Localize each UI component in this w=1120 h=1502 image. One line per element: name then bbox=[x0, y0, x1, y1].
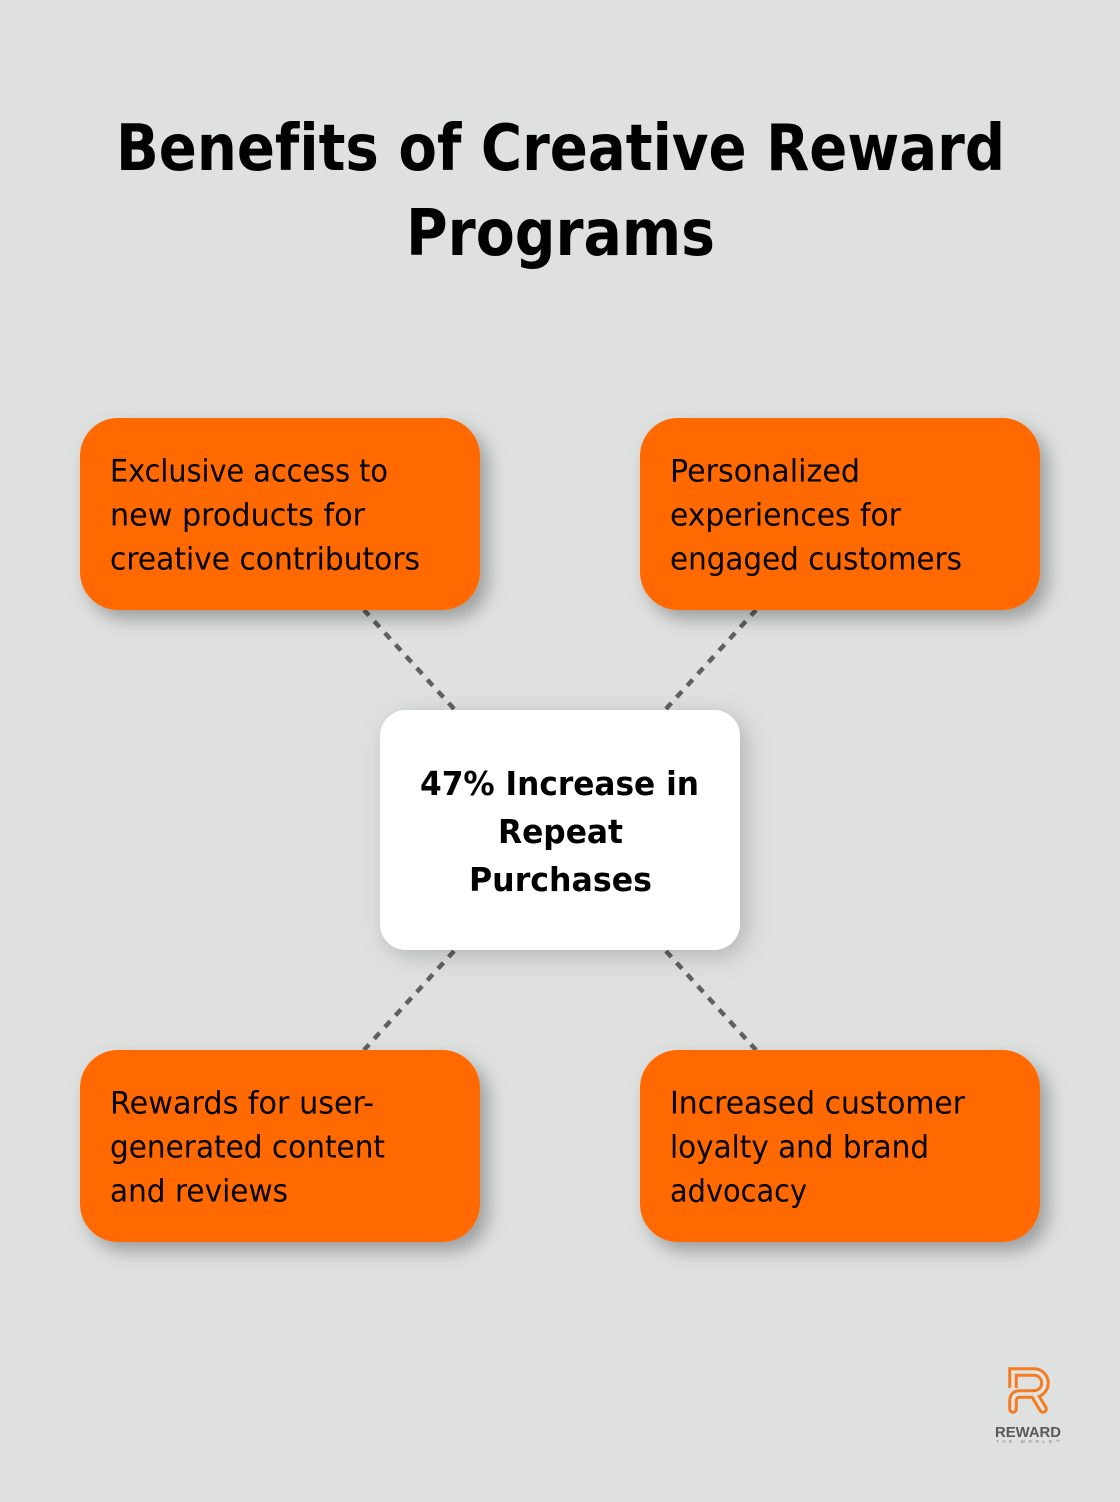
connector: bottom left bbox=[364, 950, 455, 1050]
panel: exclusive access: Exclusive access to bbox=[110, 454, 388, 490]
panel: personalized experiences: engaged customers bbox=[670, 542, 962, 578]
panel: exclusive access: new products for bbox=[110, 498, 365, 534]
tagline: THE WORLD™ bbox=[996, 1439, 1060, 1444]
panel: user-generated rewards: generated content bbox=[110, 1130, 385, 1166]
panel: customer loyalty: Increased customer bbox=[670, 1086, 965, 1122]
panel: personalized experiences bbox=[640, 418, 1040, 610]
panel: central stat: 47% Increase in bbox=[420, 764, 699, 803]
panel: user-generated rewards bbox=[80, 1050, 480, 1242]
title: Benefits of Creative Reward bbox=[116, 112, 1005, 186]
connector: top left bbox=[364, 610, 455, 710]
icon: R mark bbox=[1013, 1372, 1045, 1409]
panel: customer loyalty: loyalty and brand bbox=[670, 1130, 929, 1166]
panel: exclusive access bbox=[80, 418, 480, 610]
panel: user-generated rewards: Rewards for user- bbox=[110, 1086, 374, 1122]
panel: exclusive access: creative contributors bbox=[110, 542, 420, 578]
logo: Reward the World bbox=[995, 1372, 1061, 1444]
panel: customer loyalty: advocacy bbox=[670, 1174, 807, 1210]
connector: top right bbox=[665, 610, 756, 710]
panel: user-generated rewards: and reviews bbox=[110, 1174, 288, 1210]
panel: personalized experiences: Personalized bbox=[670, 454, 860, 490]
panel: customer loyalty bbox=[640, 1050, 1040, 1242]
panel: personalized experiences: experiences for bbox=[670, 498, 901, 534]
wordmark: REWARD bbox=[995, 1424, 1061, 1441]
connector: bottom right bbox=[665, 950, 756, 1050]
panel: central stat: Repeat bbox=[498, 812, 623, 851]
title: Programs bbox=[406, 197, 715, 271]
title bbox=[116, 112, 1005, 271]
panel: central stat bbox=[380, 710, 740, 950]
panel: central stat: Purchases bbox=[469, 860, 652, 899]
